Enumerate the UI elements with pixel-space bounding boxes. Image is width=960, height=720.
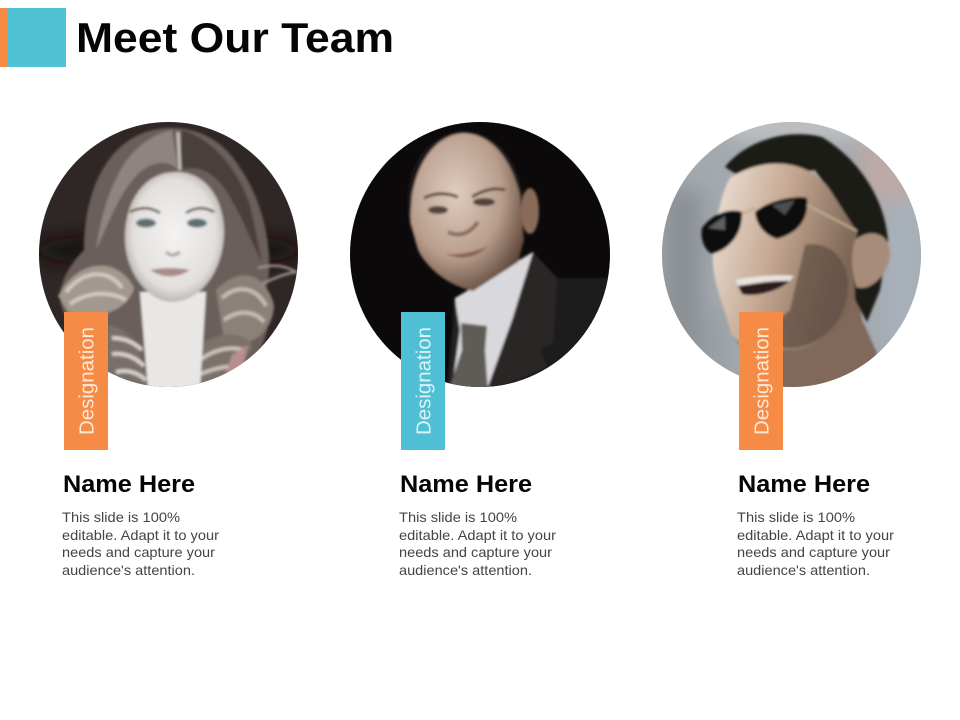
designation tag: second member bbox=[401, 312, 445, 450]
photo: woman portrait bbox=[28, 122, 308, 392]
description: second member: audience's attention. bbox=[399, 562, 532, 578]
designation tag: second member: Designation bbox=[414, 327, 436, 435]
description: third member bbox=[737, 509, 894, 578]
photo: older man in suit bbox=[350, 122, 612, 392]
description: first member: This slide is 100% bbox=[62, 509, 180, 525]
description: first member: needs and capture your bbox=[62, 544, 215, 560]
description: first member bbox=[62, 509, 219, 578]
description: first member: audience's attention. bbox=[62, 562, 195, 578]
designation tag: third member bbox=[739, 312, 783, 450]
designation tag: third member: Designation bbox=[752, 327, 774, 435]
description: third member: editable. Adapt it to your bbox=[737, 527, 894, 543]
description: third member: audience's attention. bbox=[737, 562, 870, 578]
description: third member: This slide is 100% bbox=[737, 509, 855, 525]
description: second member bbox=[399, 509, 556, 578]
photo: smiling man with sunglasses bbox=[662, 118, 925, 392]
designation tag: first member bbox=[64, 312, 108, 450]
designation tag: first member: Designation bbox=[76, 327, 98, 435]
description: third member: needs and capture your bbox=[737, 544, 890, 560]
title: Meet Our Team bbox=[76, 14, 394, 61]
name: third member: Name Here bbox=[738, 471, 870, 498]
description: second member: This slide is 100% bbox=[399, 509, 517, 525]
description: second member: editable. Adapt it to your bbox=[399, 527, 556, 543]
description: second member: needs and capture your bbox=[399, 544, 552, 560]
name: first member: Name Here bbox=[63, 471, 195, 498]
title accent block bbox=[0, 8, 66, 67]
description: first member: editable. Adapt it to your bbox=[62, 527, 219, 543]
name: second member: Name Here bbox=[400, 471, 532, 498]
